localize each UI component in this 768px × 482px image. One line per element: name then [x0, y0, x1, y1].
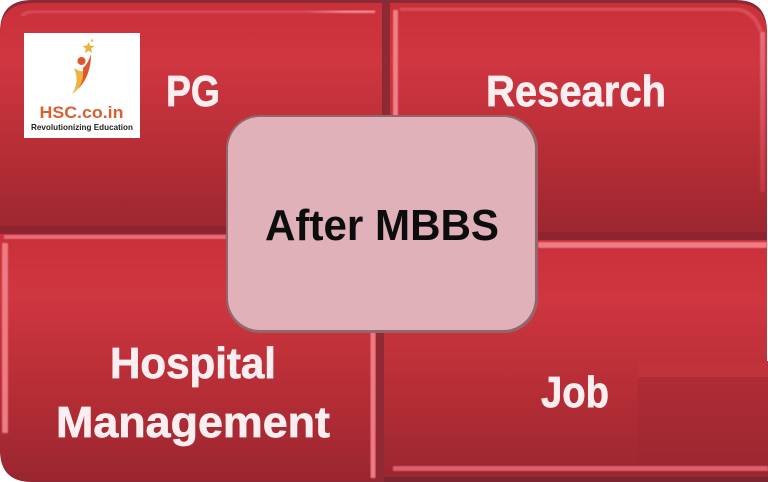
center box: After MBBS — [226, 115, 538, 333]
heading: PG: PG — [166, 67, 220, 116]
heading: Research: Research — [486, 67, 666, 116]
center label: After MBBS — [265, 201, 499, 250]
logo: HSC.co.in — [24, 33, 140, 138]
panel: Research — [384, 2, 767, 240]
logo name: HSC.co.in — [40, 103, 124, 122]
logo tagline: Revolutionizing Education — [31, 122, 133, 132]
heading: Hospital Management: Management — [56, 398, 330, 447]
heading: Hospital Management — [56, 339, 330, 447]
panel: Job — [376, 240, 768, 482]
panel: PG — [0, 3, 382, 237]
heading: Job: Job — [541, 368, 609, 417]
icon: figure with star — [72, 38, 94, 94]
patch: overlay at lower right — [638, 361, 768, 465]
panel: Hospital Management — [0, 234, 376, 481]
heading: Hospital Management: Hospital — [110, 339, 276, 388]
